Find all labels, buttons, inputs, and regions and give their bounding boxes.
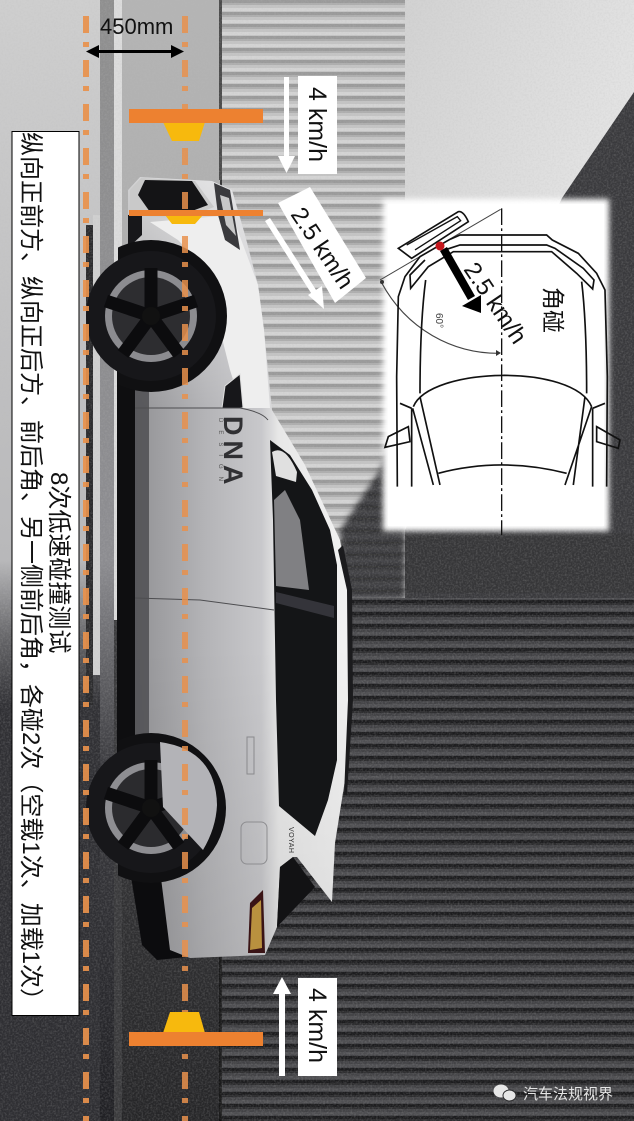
front door vent (222, 374, 243, 408)
speed label: 4 km/h top: 4 km/h (303, 87, 331, 162)
inset panel: corner impact diagram (380, 199, 620, 535)
speed label: 2.5 km/h (278, 187, 366, 303)
side-on car seen from above (75, 177, 353, 960)
angle end points (380, 280, 501, 356)
rear lower black diffuser (130, 870, 187, 960)
headlight (214, 183, 240, 250)
door seams (135, 408, 274, 610)
mirror (272, 450, 297, 482)
speed label: 4 km/h bottom: 4 km/h (303, 988, 331, 1063)
dimension arrow (86, 45, 184, 58)
side shading (135, 370, 149, 770)
DNA branding: DNA (218, 416, 248, 490)
door handle (247, 737, 254, 774)
description: 纵向正前方、纵向正后方、前后角、另一侧前后角，各碰2次（空载1次、加载1次） (17, 132, 44, 1012)
label: corner impact: 角碰 (540, 287, 566, 333)
rear wheel (86, 743, 216, 873)
icon: chat bubbles (494, 1084, 516, 1101)
tail light (248, 890, 265, 953)
car body (128, 177, 350, 958)
VOYAH badge: VOYAH (287, 827, 294, 854)
impact point (436, 242, 444, 250)
roof edge (338, 545, 353, 795)
label: 60 degrees: 60° (433, 313, 444, 328)
rear wheel cover (160, 742, 217, 850)
top barrier (129, 109, 263, 141)
arrow: up bottom (273, 977, 291, 1076)
side window (270, 440, 337, 836)
inset speed label: 2.5 km/h (458, 258, 532, 349)
impact arrow (440, 247, 481, 313)
front fender highlight (150, 215, 270, 408)
watermark (494, 1084, 613, 1103)
bottom barrier (129, 1012, 263, 1046)
branding small print: DESIGN (217, 418, 223, 489)
watermark: 汽车法规视界 (523, 1086, 613, 1103)
sill (117, 360, 157, 760)
speed label: 4 km/h top (298, 76, 337, 174)
speed label: 2.5 km/h: 2.5 km/h (285, 203, 359, 294)
front wheel arch (118, 240, 227, 392)
rear wheel arch (118, 733, 226, 882)
fuel flap (241, 822, 267, 864)
front grille and bumper (130, 178, 214, 218)
arrow: diagonal (265, 218, 324, 309)
450mm dimension: 450mm (100, 14, 173, 39)
text panel: test description (12, 132, 79, 1016)
450mm dimension (86, 14, 184, 58)
front contact barrier (129, 210, 263, 224)
front wheel (86, 251, 216, 381)
speed label: 4 km/h bottom (298, 978, 337, 1076)
car outline drawing (380, 208, 620, 535)
arrow: down top (278, 77, 295, 173)
heading: 8次低速碰撞测试 (45, 472, 72, 653)
reference dash-dot lines (86, 16, 185, 1121)
rear black wedge (277, 857, 315, 927)
